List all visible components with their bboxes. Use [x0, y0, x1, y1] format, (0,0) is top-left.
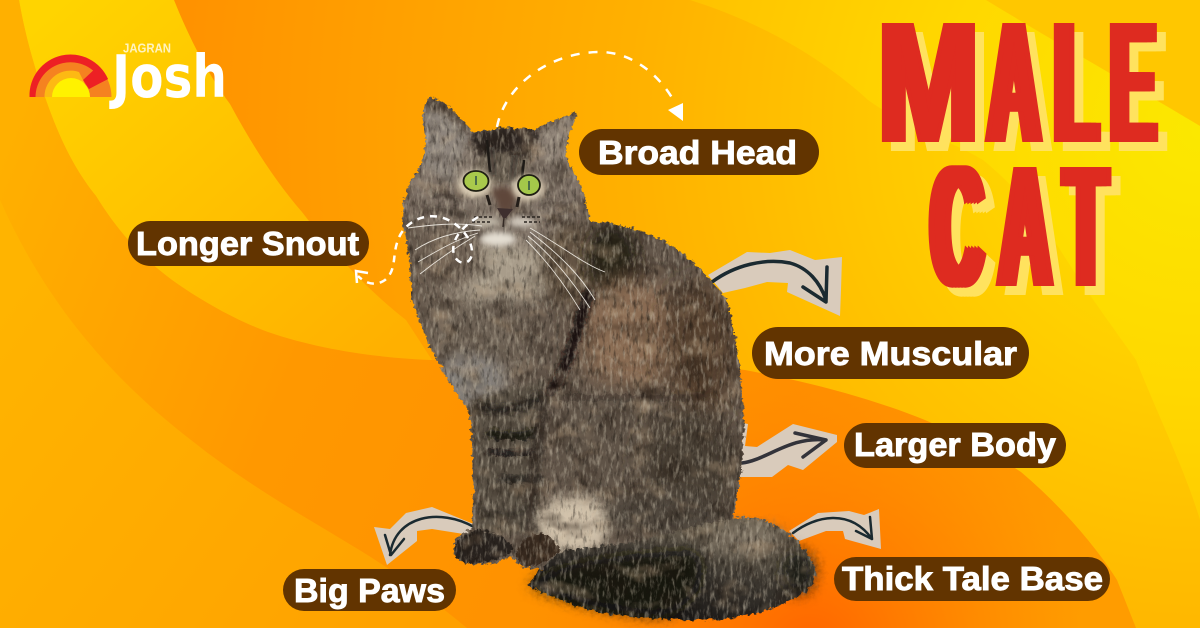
label: larger body: Larger Body: [854, 426, 1057, 463]
cat face details: [458, 140, 544, 246]
label: broad head: [579, 129, 819, 175]
label: big paws: Big Paws: [294, 572, 445, 609]
dashed arrow: broad head: [497, 52, 683, 127]
nose: [497, 208, 513, 218]
cat body and head fur: [390, 90, 760, 580]
arrow: larger body: [740, 423, 837, 477]
cat tail: [528, 518, 815, 620]
cat illustration: [390, 90, 815, 620]
label: more muscular: More Muscular: [764, 335, 1017, 372]
title line: CAT: A: [999, 129, 1051, 323]
title line: CAT: [928, 129, 1120, 323]
arrow: big paws: [374, 507, 476, 565]
title line: CAT: C: [932, 129, 982, 323]
title: Male Cat: [878, 0, 1168, 323]
right eye: [512, 175, 544, 201]
label: longer snout: Longer Snout: [136, 225, 359, 262]
dashed arrow: longer snout: [356, 216, 478, 284]
label: broad head: Broad Head: [598, 134, 797, 171]
title line: CAT: T: [1064, 129, 1107, 323]
logo wordmark large: Josh: [109, 42, 227, 111]
cat paws: [453, 530, 561, 567]
cat whiskers: [408, 224, 605, 310]
logo: Jagran Josh: [29, 40, 227, 111]
arrow: more muscular: [708, 250, 842, 316]
logo wordmark small: JAGRAN: [123, 40, 171, 56]
arrow: thick tail base: [789, 509, 881, 549]
label: thick tale base: Thick Tale Base: [842, 560, 1103, 597]
icon: rising sun emblem: [29, 55, 112, 97]
label: more muscular: [752, 327, 1029, 379]
title line: MALE: [878, 0, 1168, 179]
left eye: [458, 170, 492, 198]
